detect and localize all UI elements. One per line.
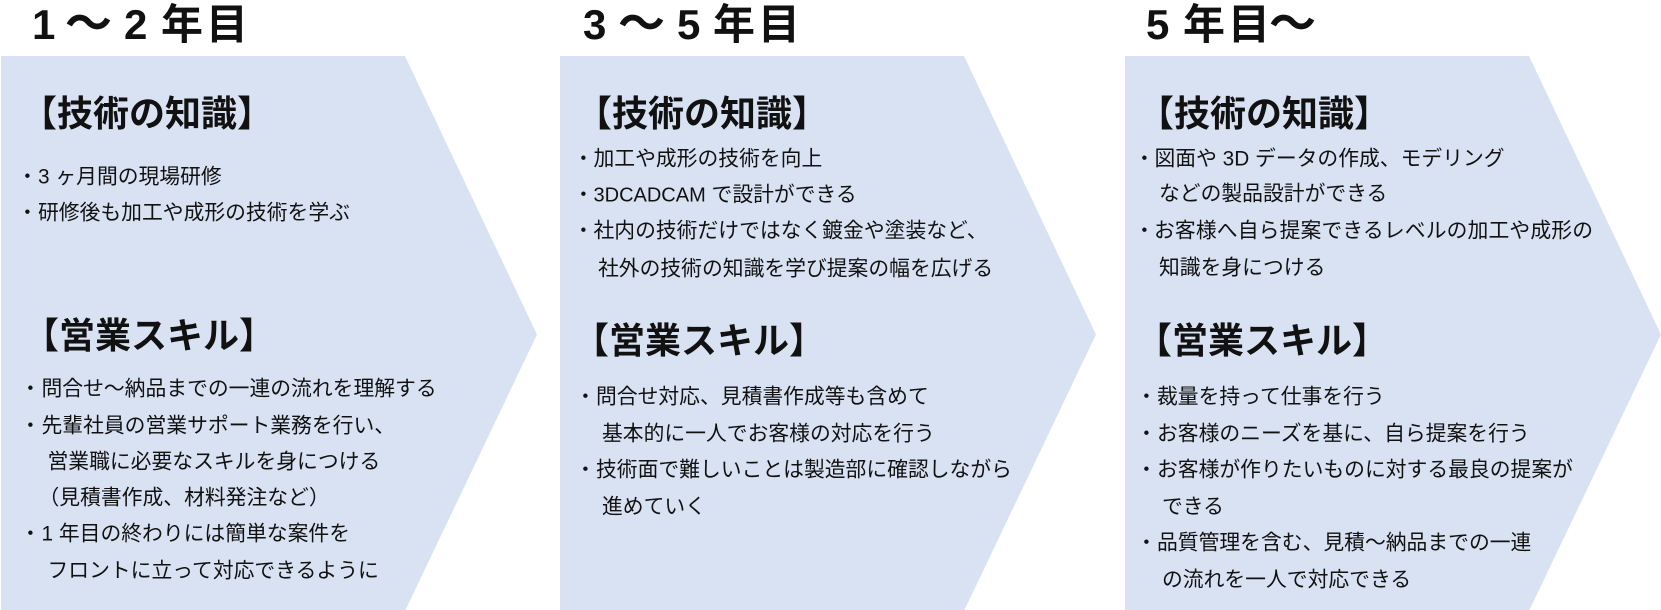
sales skills list: ・ [20, 378, 41, 400]
sales skills list: ・ [575, 458, 596, 482]
sales skills list: 品質管理を含む、見積～納品までの一連 [1157, 532, 1531, 554]
sales skills list: ・ [575, 386, 596, 408]
sales skills list: 問合せ～納品までの一連の流れを理解する [42, 378, 437, 400]
technical knowledge list [1134, 148, 1593, 280]
technical knowledge list: 3DCADCAM で設計ができる [594, 184, 857, 206]
arrow shape 2 [560, 56, 1096, 610]
sales skills list: 先輩社員の営業サポート業務を行い、 [42, 414, 395, 438]
sales skills list: お客様のニーズを基に、自ら提案を行う [1157, 422, 1530, 446]
sales skills list: お客様が作りたいものに対する最良の提案が [1157, 458, 1573, 482]
technical knowledge list: 社内の技術だけではなく鍍金や塗装など、 [594, 220, 988, 242]
sales skills list: 進めていく [602, 496, 706, 518]
sales skills list: 基本的に一人でお客様の対応を行う [602, 422, 935, 446]
arrow shape 3 [1125, 56, 1661, 610]
technical knowledge list: 社外の技術の知識を学び提案の幅を広げる [598, 258, 993, 280]
arrow shape 1 [1, 56, 537, 610]
technical knowledge list [17, 166, 350, 224]
panel: 5+ years [1125, 0, 1661, 610]
sales skills list: できる [1162, 496, 1224, 518]
title: 1-2 years: 12年目 [32, 1, 248, 48]
panel: 1-2 years [1, 0, 537, 610]
heading: sales skills: 【営業スキル】 [1136, 320, 1388, 361]
sales skills list: ・ [20, 414, 41, 438]
technical knowledge list: ・ [573, 184, 594, 206]
technical knowledge list: ・ [1134, 220, 1155, 242]
sales skills list [575, 386, 1012, 518]
technical knowledge list: 知識を身につける [1159, 256, 1325, 280]
sales skills list: ・ [1136, 532, 1157, 554]
technical knowledge list: などの製品設計ができる [1159, 182, 1387, 206]
technical knowledge list: 3 ヶ月間の現場研修 [38, 166, 222, 188]
technical knowledge list: ・ [1134, 148, 1155, 170]
sales skills list: ・ [1136, 458, 1157, 482]
technical knowledge list: ・ [573, 220, 594, 242]
sales skills list: ・ [20, 522, 41, 546]
sales skills list: ・ [1136, 386, 1157, 408]
technical knowledge list: ・ [17, 202, 38, 224]
technical knowledge list: 研修後も加工や成形の技術を学ぶ [38, 202, 350, 224]
technical knowledge list: お客様へ自ら提案できるレベルの加工や成形の [1154, 220, 1593, 242]
sales skills list: フロントに立って対応できるように [48, 560, 379, 582]
sales skills list [20, 378, 437, 582]
sales skills list: ・ [1136, 422, 1157, 446]
sales skills list: の流れを一人で対応できる [1162, 568, 1411, 592]
sales skills list: 営業職に必要なスキルを身につける [48, 450, 380, 474]
heading: sales skills: 【営業スキル】 [573, 320, 825, 361]
title: 5+ years: 5年目 [1146, 1, 1270, 48]
panel: 3-5 years [560, 0, 1096, 610]
sales skills list [1136, 386, 1573, 592]
heading: sales skills: 【営業スキル】 [23, 315, 275, 356]
sales skills list: 問合せ対応、見積書作成等も含めて [596, 386, 929, 408]
heading: technical knowledge: 【技術の知識】 [21, 93, 273, 134]
technical knowledge list: ・ [573, 148, 594, 170]
title: 3-5 years: 35年目 [583, 1, 800, 48]
sales skills list: 技術面で難しいことは製造部に確認しながら [596, 458, 1012, 482]
heading: technical knowledge: 【技術の知識】 [576, 93, 828, 134]
technical knowledge list: 加工や成形の技術を向上 [594, 148, 822, 170]
heading: technical knowledge: 【技術の知識】 [1138, 93, 1390, 134]
technical knowledge list: 図面や 3D データの作成、モデリング [1154, 148, 1505, 170]
sales skills list: （見積書作成、材料発注など） [38, 486, 330, 510]
sales skills list: 1 年目の終わりには簡単な案件を [42, 522, 350, 546]
technical knowledge list: ・ [17, 166, 38, 188]
technical knowledge list [573, 148, 993, 280]
sales skills list: 裁量を持って仕事を行う [1157, 386, 1385, 408]
